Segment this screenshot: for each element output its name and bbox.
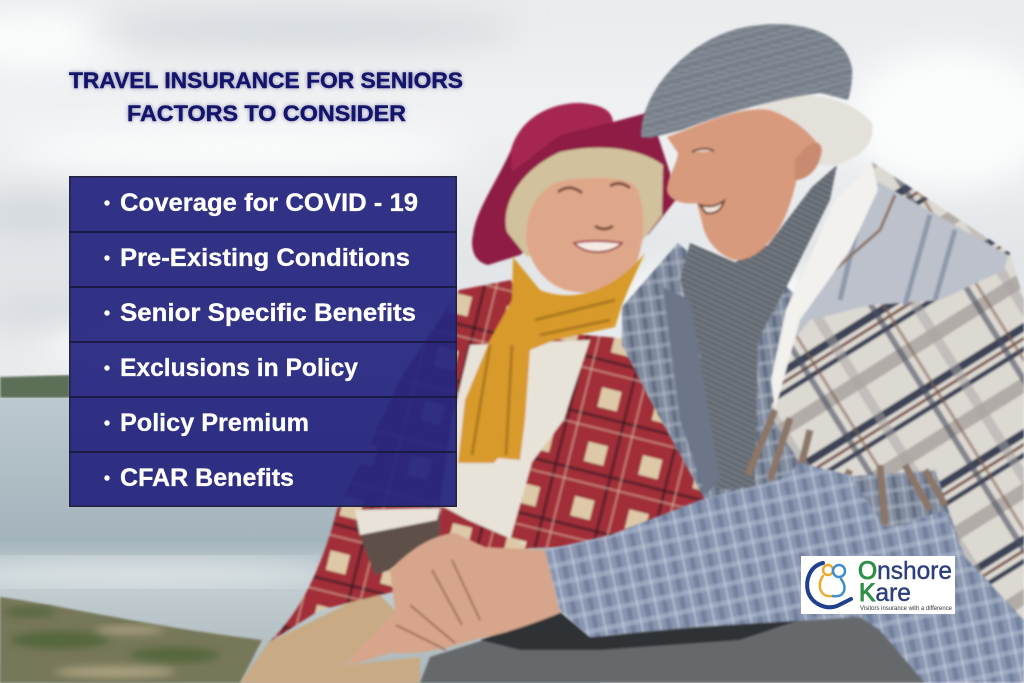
list item: Policy Premium: Policy Premium [120, 409, 309, 437]
logo wordmark: Onshore [858, 557, 952, 585]
man: white hair [755, 95, 873, 165]
sea [0, 398, 600, 683]
woman: beige trousers [240, 590, 420, 683]
title [67, 68, 465, 126]
woman: yellow scarf [458, 253, 645, 463]
distant treeline [0, 375, 70, 398]
logo wordmark: Kare [859, 579, 911, 607]
woman: hat crown highlight [511, 103, 613, 172]
man: smile and eye [692, 149, 724, 213]
list item: CFAR Benefits: CFAR Benefits [120, 464, 294, 492]
woman: cream sweater [440, 340, 590, 545]
woman: coat lapel [510, 385, 623, 543]
man: striped blanket [770, 162, 1024, 620]
man: ear and hair detail [795, 143, 822, 180]
man: blanket fringe [748, 410, 945, 525]
woman: red plaid coat [268, 280, 707, 643]
shore [0, 597, 262, 683]
woman: eyes and nose [558, 183, 630, 229]
title: FACTORS TO CONSIDER [127, 101, 406, 126]
woman: knit cuff with brown sleeve [355, 508, 440, 575]
list item: Coverage for COVID - 19: Coverage for COVID - 19 [120, 189, 418, 217]
woman: face [526, 178, 643, 293]
logo: Onshore Kare [801, 556, 955, 614]
woman [240, 103, 707, 683]
man: face [667, 109, 820, 260]
man: plaid sleeve [545, 463, 1024, 683]
man: blanket upper grey-blue fold [786, 182, 1008, 350]
man [345, 24, 1024, 683]
title: TRAVEL INSURANCE FOR SENIORS [69, 68, 463, 93]
man: dark trousers [420, 600, 925, 683]
logo wordmark [858, 557, 952, 612]
logo icon: caring hand and family [807, 563, 851, 607]
woman: blond hair [506, 148, 663, 265]
list item: Senior Specific Benefits: Senior Specific Benefits [120, 299, 416, 327]
couple: clasped hands [345, 533, 560, 667]
man: coat lapel shadow [663, 287, 720, 495]
man: grey plaid coat [622, 243, 1024, 683]
sky [0, 0, 1024, 400]
list item: Exclusions in Policy: Exclusions in Policy [120, 354, 358, 382]
man: grey knit scarf [680, 165, 837, 490]
woman: smile [574, 241, 622, 252]
woman: burgundy hat [472, 103, 678, 265]
man: white collar fold [771, 162, 878, 410]
list item: Pre-Existing Conditions: Pre-Existing Conditions [120, 244, 410, 272]
man: grey flat cap [641, 24, 852, 138]
panel: factors list [69, 176, 457, 507]
